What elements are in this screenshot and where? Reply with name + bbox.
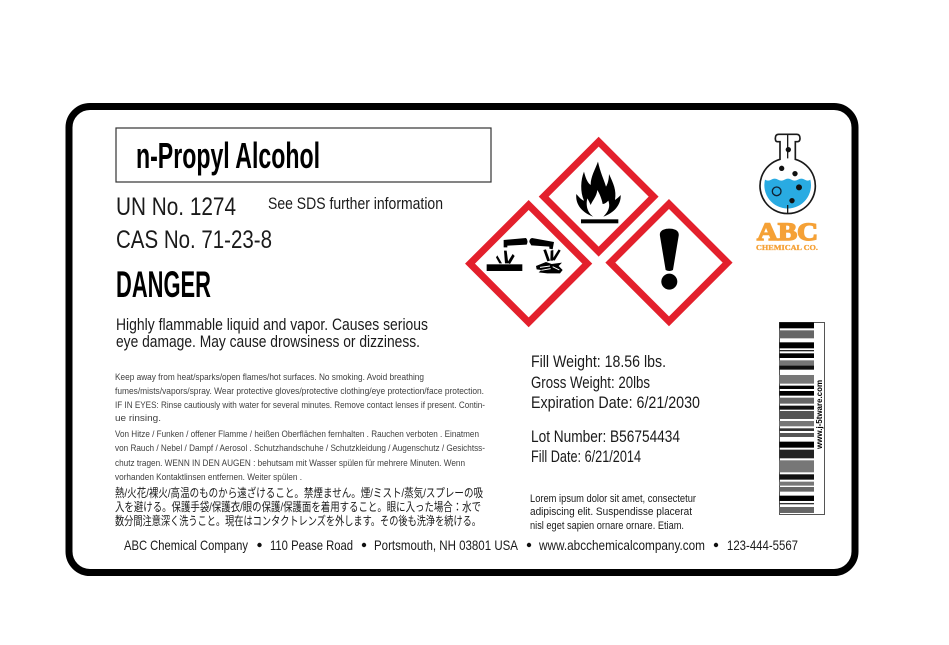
- pictogram: exclamation mark: [610, 204, 728, 321]
- lot details: [531, 428, 680, 466]
- precautionary text: English: Keep away from heat/sparks/open flames/hot surfaces. No smoking. Avoid breathing: [115, 372, 424, 382]
- precautionary text: German: von Rauch / Nebel / Dampf / Aerosol . Schutzhandschuhe / Schutzkleidung / Augenschutz / Gesichtss-: [115, 443, 485, 453]
- hazard statement: Highly flammable liquid and vapor. Causes serious: [116, 315, 428, 334]
- precautionary text: Japanese: 入を避ける。保護手袋/保護衣/眼の保護/保護面を着用すること。眼に入った場合：水で: [115, 499, 481, 514]
- icon: flask: [760, 134, 815, 214]
- barcode bars: [779, 322, 814, 513]
- fill details: Fill Weight: 18.56 lbs.: [531, 353, 666, 371]
- title box: [116, 128, 491, 182]
- footer contact line: www.abcchemicalcompany.com: [538, 537, 705, 553]
- precautionary text: English: IF IN EYES: Rinse cautiously with water for several minutes. Remove contact lenses if present. Contin-: [115, 400, 485, 410]
- lorem ipsum note: nisl eget sapien ornare ornare. Etiam.: [530, 520, 684, 532]
- fill details: Gross Weight: 20lbs: [531, 374, 650, 392]
- CAS number: CAS No. 71-23-8: [116, 226, 272, 254]
- precautionary text: German: vorhanden Kontaktlinsen entfernen. Weiter spülen .: [115, 472, 302, 482]
- precautionary text: English: ue rinsing.: [115, 413, 161, 423]
- hazard statement: eye damage. May cause drowsiness or dizziness.: [116, 332, 420, 351]
- label border: [69, 106, 855, 572]
- precautionary text: German: [115, 429, 485, 482]
- precautionary text: Japanese: 熱/火花/裸火/高温のものから遠ざけること。禁煙ません。煙/ミスト/蒸気/スプレーの吸: [115, 485, 483, 500]
- precautionary text: Japanese: 数分間注意深く洗うこと。現在はコンタクトレンズを外します。その後も洗浄を続ける。: [115, 513, 481, 528]
- pictogram: corrosive: [470, 205, 587, 322]
- footer contact line: 110 Pease Road: [270, 537, 353, 553]
- barcode caption: www.j-5tware.com: [814, 380, 824, 450]
- title box: n-Propyl Alcohol: [136, 135, 320, 176]
- lorem ipsum note: [530, 493, 696, 532]
- lorem ipsum note: adipiscing elit. Suspendisse placerat: [530, 506, 692, 518]
- footer contact line: ABC Chemical Company: [124, 537, 248, 553]
- precautionary text: Japanese: [115, 485, 483, 528]
- precautionary text: German: chutz tragen. WENN IN DEN AUGEN : behutsam mit Wasser spülen für mehrere Minuten. Wenn: [115, 458, 465, 468]
- SDS note: See SDS further information: [268, 194, 443, 213]
- logo subtitle: CHEMICAL CO.: [756, 244, 818, 252]
- signal word: DANGER: [116, 264, 211, 305]
- footer contact line: [124, 537, 798, 553]
- UN number: UN No. 1274: [116, 193, 236, 221]
- lot details: Fill Date: 6/21/2014: [531, 448, 641, 466]
- company logo: [756, 134, 818, 252]
- precautionary text: English: fumes/mists/vapors/spray. Wear protective gloves/protective clothing/eye protection/face protection.: [115, 386, 484, 396]
- footer contact line: Portsmouth, NH 03801 USA: [374, 537, 519, 553]
- pictogram: flammable: [544, 142, 654, 252]
- precautionary text: English: [115, 372, 485, 423]
- fill details: Expiration Date: 6/21/2030: [531, 394, 700, 412]
- footer contact line: 123-444-5567: [727, 537, 798, 553]
- lot details: Lot Number: B56754434: [531, 428, 680, 446]
- hazard statement: [116, 315, 428, 351]
- barcode: [779, 322, 824, 514]
- logo wordmark: ABC: [757, 219, 818, 246]
- precautionary text: German: Von Hitze / Funken / offener Flamme / heißen Oberflächen fernhalten . Rauchen verboten . Einatmen: [115, 429, 479, 439]
- fill details: [531, 353, 700, 412]
- lorem ipsum note: Lorem ipsum dolor sit amet, consectetur: [530, 493, 696, 505]
